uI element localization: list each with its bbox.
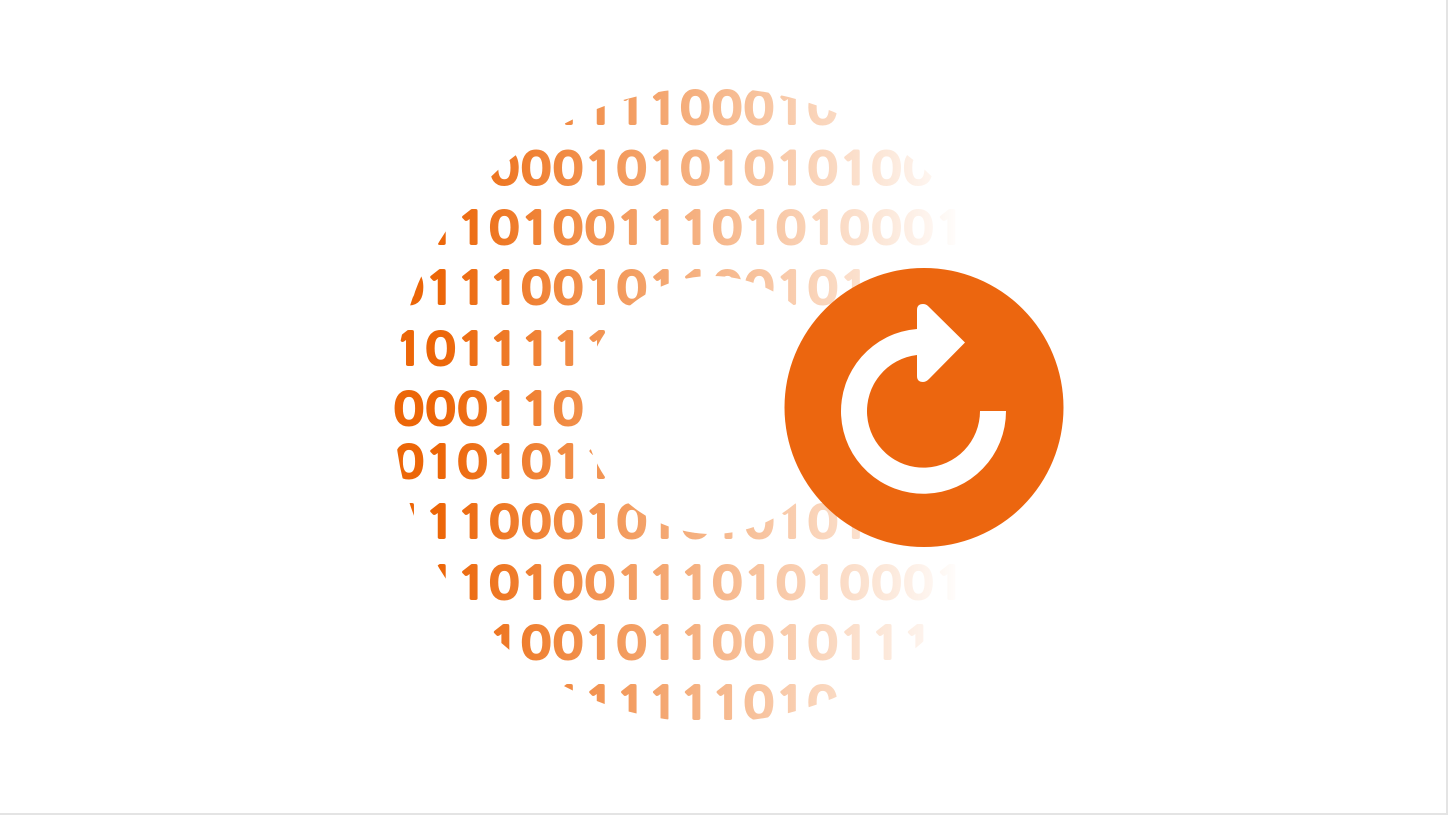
binary row 5: 1011111 — [393, 329, 616, 372]
binary row 3: 11010011101010001 — [424, 208, 966, 251]
binary row 4: 011100101100101 — [393, 268, 870, 311]
binary row 1: 111100010 — [552, 88, 838, 131]
badge circle — [784, 268, 1064, 547]
binary row 2: 00010101010100 — [488, 148, 934, 192]
binary row 6: 000110 — [393, 389, 584, 432]
binary row 10: 10010110010111 — [488, 623, 934, 666]
binary digit ring — [393, 88, 966, 726]
binary row 9: 11010011101010001 — [424, 563, 966, 606]
icon: circular refresh arrow — [841, 304, 1006, 494]
binary row 8: 111000101010101 — [393, 502, 870, 545]
refresh icon badge — [784, 268, 1064, 547]
binary row 7: 0101011 — [393, 442, 616, 485]
binary row 11: 111111010 — [552, 683, 838, 726]
